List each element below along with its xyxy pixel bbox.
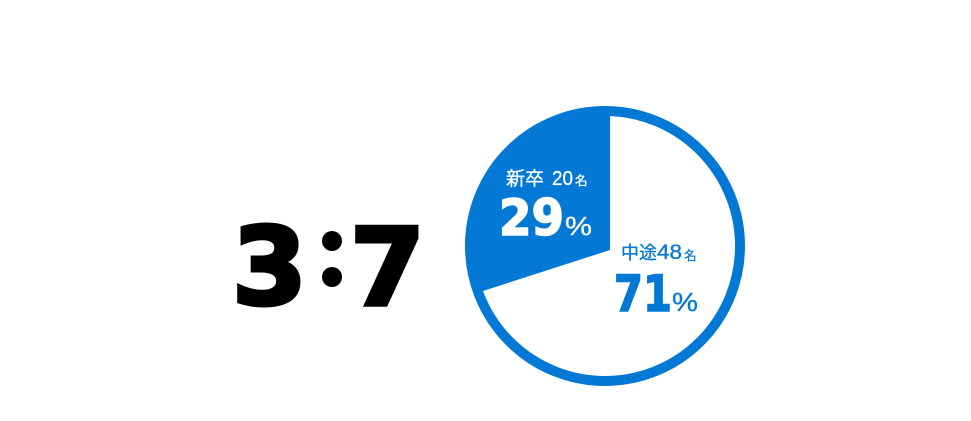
label: new graduates [499,168,592,247]
label: mid-career: 48 [657,241,682,264]
ratio 3:7 [232,206,425,331]
label: new graduates: 名 [575,173,588,188]
value 29%: % [565,211,592,241]
label: new graduates: 新卒 [506,168,544,190]
digit 7: 7 [350,207,425,331]
colon [322,231,342,287]
digit 3: 3 [232,206,307,330]
value 71%: % [672,287,698,317]
ring [470,111,740,381]
label: new graduates: 20 [552,168,573,190]
value 71%: 71 [614,265,672,323]
label: mid-career: 名 [684,248,697,263]
label: mid-career: 中途 [621,243,657,263]
value 29%: 29 [499,189,564,247]
wedge: new graduates 29% [465,107,610,291]
pie chart [465,107,740,381]
label: mid-career [614,241,698,323]
